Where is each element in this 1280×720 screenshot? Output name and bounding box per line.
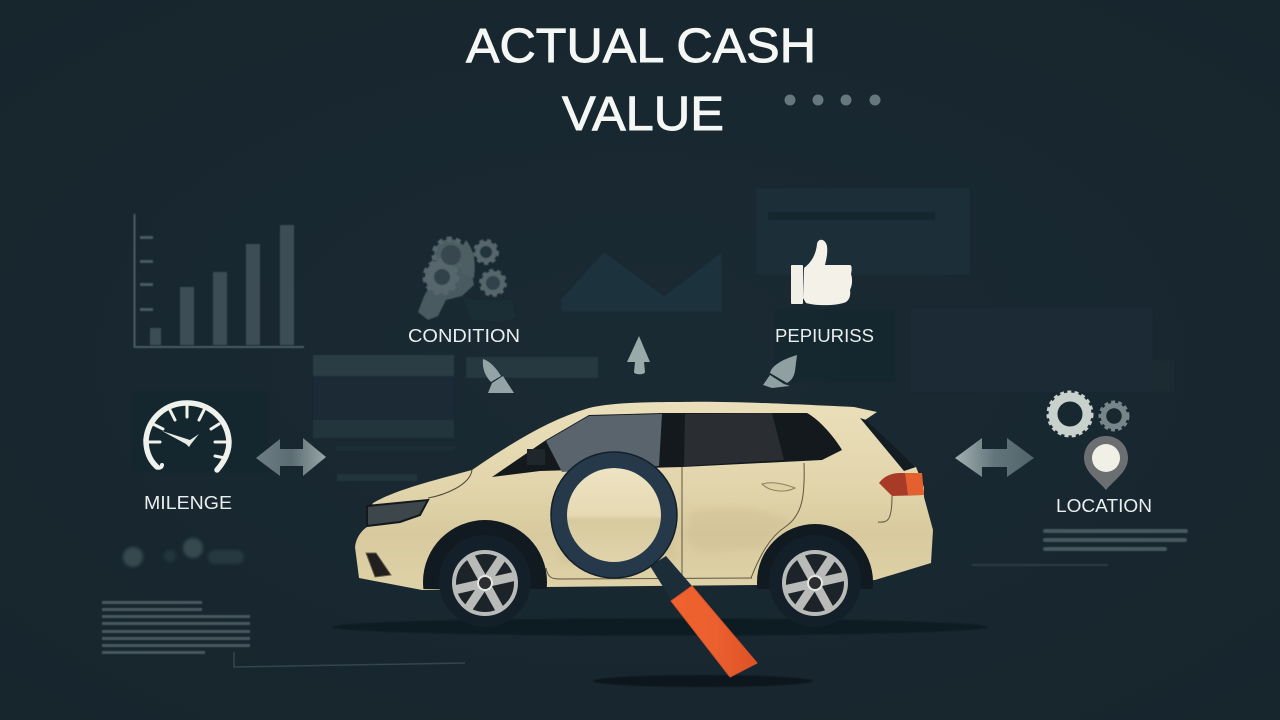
text block: left lines [102, 601, 250, 654]
front glass [546, 414, 662, 472]
icon: speedometer [146, 403, 229, 470]
mirror [527, 449, 545, 465]
magnifying glass [551, 452, 757, 677]
door lines [546, 463, 892, 579]
panel: background cards [132, 188, 1175, 481]
headlight [367, 500, 428, 526]
arrow: right double arrow [955, 438, 1034, 477]
handle neck [650, 556, 692, 601]
rear wheel arch [757, 524, 873, 589]
speedometer needle [162, 431, 199, 447]
arrow: left double arrow [256, 438, 326, 476]
door handle [762, 483, 795, 491]
title [466, 20, 816, 141]
icon: mountain chart [561, 252, 722, 312]
ring [559, 460, 669, 570]
front wheel [439, 535, 531, 627]
car body [355, 402, 933, 590]
lens [567, 468, 661, 562]
title: ACTUAL CASH [466, 20, 816, 73]
bar chart [134, 214, 304, 347]
decorative dots [784, 94, 880, 106]
magnifier shadow [593, 675, 813, 687]
decorative circles [123, 538, 244, 567]
label: mileage: MILENGE [144, 492, 232, 513]
icon: small gear [1100, 402, 1128, 430]
rear glass [684, 413, 784, 466]
label: perks: PEPIURISS [775, 325, 874, 346]
side window frame [492, 413, 842, 477]
label: condition: CONDITION [408, 325, 520, 346]
orange handle [671, 586, 757, 677]
icon: condition gears [418, 239, 516, 322]
icon: large gear [1048, 392, 1092, 436]
body shading [560, 508, 790, 565]
car illustration [355, 402, 933, 644]
icon: up arrow [627, 336, 650, 374]
connector line [234, 652, 465, 667]
tail light [879, 473, 924, 496]
rear window strip [860, 418, 916, 471]
label: location: LOCATION [1056, 496, 1152, 516]
icon: small left marker [483, 359, 514, 393]
text block: right lines [972, 529, 1188, 566]
fog lamp [366, 553, 391, 577]
rear wheel [769, 535, 861, 627]
icon: thumbs up [791, 240, 852, 305]
front wheel arch [423, 520, 547, 589]
icon: small right marker [763, 355, 797, 388]
ground shadow [332, 618, 988, 636]
title: VALUE [562, 88, 724, 141]
hood line [428, 470, 472, 498]
icon: location pin [1084, 436, 1128, 490]
